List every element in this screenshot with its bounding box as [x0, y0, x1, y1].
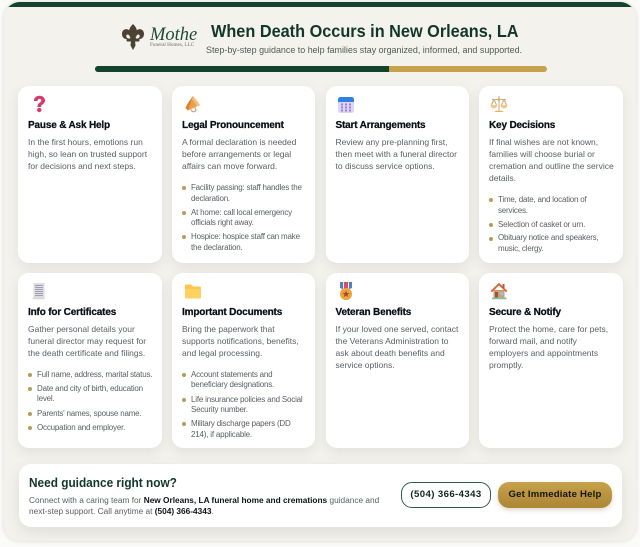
text: next-step support. Call anytime at (504) 366-4343. [29, 506, 214, 516]
logo wordmark: Mothe [150, 25, 197, 45]
text: Bring the paperwork that [182, 324, 275, 334]
subtitle: Step-by-step guidance to help families stay organized, informed, and supported. [206, 45, 522, 55]
bullet list: Security number. [191, 405, 248, 414]
text: employers and appointments [489, 348, 598, 358]
text: then meet with a funeral director [336, 149, 457, 159]
text [182, 137, 296, 171]
bullet list: 214), if applicable. [191, 430, 252, 438]
bullet list [489, 195, 598, 253]
panel: Important Documents [172, 273, 315, 448]
bullet list: Obituary notice and speakers, [498, 233, 598, 242]
bullet list: beneficiary designations. [191, 380, 274, 389]
text: If final wishes are not known, [489, 137, 598, 147]
panel: Legal Pronouncement [172, 86, 315, 263]
logo: Mothe Funeral Homes [122, 24, 197, 50]
text: cremation and outline the service [489, 161, 614, 171]
text: to discuss service options. [336, 161, 435, 171]
title: When Death Occurs in New Orleans, LA [211, 21, 519, 41]
bullet list: Full name, address, marital status. [37, 370, 152, 379]
heading: Need guidance right now? [29, 475, 177, 490]
button: phone [401, 482, 491, 508]
icon: house [490, 282, 508, 300]
text: Connect with a caring team for New Orleans, LA funeral home and cremations guidance and [29, 494, 379, 504]
bullet list: At home: call local emergency [191, 208, 292, 216]
bullet list: Date and city of birth, education [37, 384, 143, 393]
text [489, 137, 614, 183]
text: service options. [336, 360, 395, 370]
panel: Pause & Ask Help [18, 86, 162, 263]
heading: Key Decisions [489, 120, 555, 131]
text: before arrangements or legal [182, 149, 291, 159]
icon: document [32, 283, 44, 300]
text: families will choose burial or [489, 149, 595, 159]
text [28, 324, 146, 358]
text: details. [489, 173, 516, 183]
icon: folder [184, 284, 201, 298]
bullet list: Time, date, and location of [498, 195, 587, 204]
text: for decisions and next steps. [28, 161, 136, 171]
bullet list: Occupation and employer. [37, 423, 125, 432]
bullet list [182, 370, 302, 438]
bullet list: Parents' names, spouse name. [37, 409, 141, 418]
text: Protect the home, care for pets, [489, 324, 608, 334]
bullet list: officials right away. [191, 218, 254, 227]
panel: Start Arrangements [326, 86, 469, 263]
heading: Pause & Ask Help [28, 120, 110, 131]
text [336, 137, 457, 171]
text [336, 324, 458, 370]
icon: megaphone [186, 96, 200, 112]
panel: Veteran Benefits [326, 273, 469, 448]
bullet list: the declaration. [191, 242, 243, 252]
text: high, so lean on trusted support [28, 149, 147, 159]
button: get immediate help [498, 482, 612, 508]
icon: question mark [34, 96, 45, 112]
bullet list: Selection of casket or urn. [498, 220, 585, 229]
logo tagline: Funeral Homes, LLC [150, 42, 194, 48]
text: affairs can move forward. [182, 161, 277, 171]
bullet list: level. [37, 394, 54, 403]
text: Review any pre-planning first, [336, 137, 447, 147]
bullet list [182, 183, 302, 252]
bullet list [28, 370, 152, 432]
heading: Info for Certificates [28, 307, 116, 318]
bullet list: Military discharge papers (DD [191, 419, 291, 428]
text: Gather personal details your [28, 324, 135, 334]
bullet list: Facility passing: staff handles the [191, 183, 302, 192]
panel: Key Decisions [479, 86, 622, 263]
heading: Legal Pronouncement [182, 120, 284, 131]
icon: calendar [338, 97, 354, 113]
text [182, 324, 299, 358]
text [28, 137, 148, 171]
heading: Veteran Benefits [336, 307, 411, 318]
heading: Secure & Notify [489, 307, 561, 318]
text: and legal processing. [182, 348, 262, 358]
button: get immediate help: Get Immediate Help [508, 489, 602, 500]
icon: scales [490, 96, 508, 112]
text: the death certificate and filings. [28, 348, 145, 358]
text: In the first hours, emotions run [28, 137, 143, 147]
panel: Secure & Notify [479, 273, 622, 448]
text: A formal declaration is needed [182, 137, 296, 147]
text [29, 494, 379, 516]
text: promptly. [489, 360, 523, 370]
button: phone: (504) 366-4343 [410, 489, 482, 500]
panel: Info for Certificates [18, 273, 162, 448]
heading: Start Arrangements [336, 120, 425, 131]
text: supports notifications, benefits, [182, 336, 299, 346]
icon: fleur-de-lis [122, 24, 144, 50]
bullet list: Hospice: hospice staff can make [191, 232, 300, 241]
icon: medal [340, 282, 352, 300]
text: funeral director may request for [28, 336, 146, 346]
text: the Veterans Administration to [336, 336, 448, 346]
bullet list: Life insurance policies and Social [191, 394, 302, 404]
text: If your loved one served, contact [336, 324, 458, 334]
bullet list: services. [498, 206, 528, 214]
text: ask about death benefits and [336, 348, 445, 358]
heading: Important Documents [182, 307, 282, 318]
text: forward mail, and notify [489, 336, 577, 346]
progress bar [95, 66, 547, 72]
panel: call to action [19, 464, 622, 527]
bullet list: music, clergy. [498, 244, 544, 253]
bullet list: declaration. [191, 194, 230, 202]
bullet list: Account statements and [191, 370, 272, 379]
text [489, 324, 608, 370]
